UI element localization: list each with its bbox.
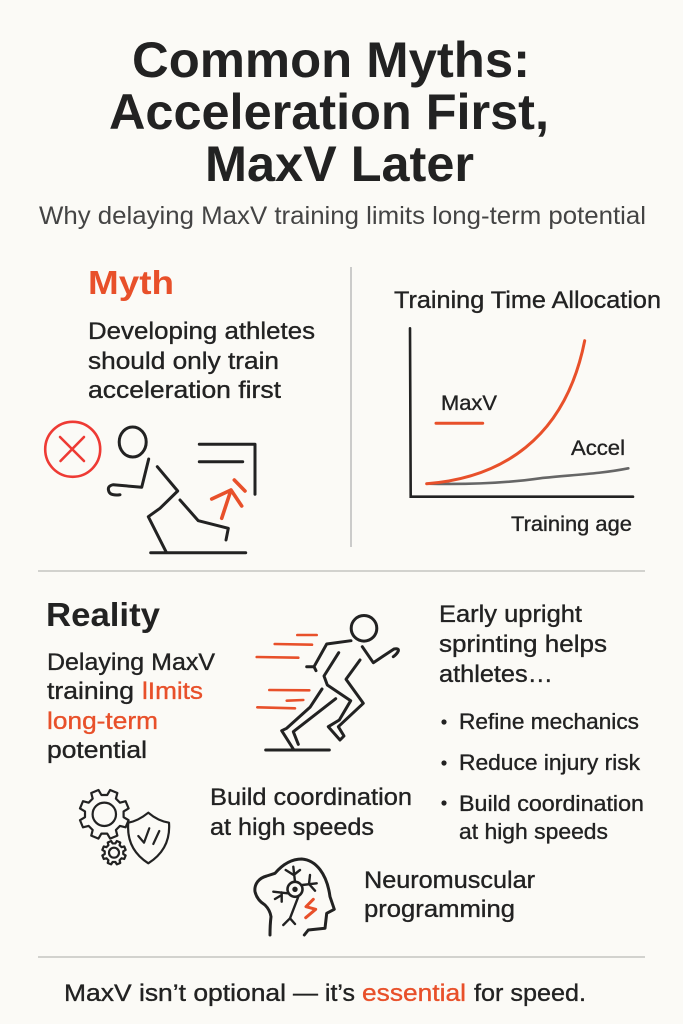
icon: red cross in circle: [45, 422, 100, 477]
myth heading: Myth: [88, 264, 174, 301]
title: MaxV Later: [205, 136, 474, 192]
subtitle: Why delaying MaxV training limits long-term potential: [39, 202, 646, 230]
maxv legend: [436, 392, 497, 423]
footer takeaway: essential: [362, 980, 466, 1007]
reality statement: training: [47, 678, 134, 705]
benefits list: Refine mechanics: [459, 709, 639, 734]
coordination caption: [210, 784, 412, 841]
accel label: Accel: [571, 437, 625, 460]
benefits list: Build coordination: [459, 791, 644, 816]
benefits intro: Early upright: [439, 601, 582, 628]
footer takeaway: — it’s: [293, 980, 355, 1007]
benefits list: at high speeds: [459, 819, 608, 844]
title: Common Myths:: [132, 32, 530, 88]
benefits list: Reduce injury risk: [459, 750, 641, 775]
neuromuscular caption: programming: [364, 896, 515, 923]
neuromuscular caption: Neuromuscular: [364, 867, 535, 894]
reality statement: potential: [47, 737, 147, 764]
icon: gears and shield: [72, 782, 169, 868]
reality statement: [47, 649, 215, 764]
icon: athlete in acceleration stance: [108, 427, 255, 553]
reality statement: lImits: [142, 678, 203, 705]
reality statement: long-term: [47, 708, 158, 735]
chart axes: [410, 328, 633, 497]
coordination caption: Build coordination: [210, 784, 412, 811]
benefits intro: athletes…: [439, 661, 553, 688]
reality heading: Reality: [46, 596, 161, 633]
footer takeaway: MaxV isn’t optional: [64, 980, 286, 1007]
accel line: [427, 468, 628, 484]
maxv legend: MaxV: [441, 392, 497, 415]
benefits intro: sprinting helps: [439, 631, 607, 658]
panel: myth: [45, 264, 315, 553]
reality statement: Delaying MaxV: [47, 649, 215, 676]
icon: orange upward arrow: [212, 480, 245, 518]
myth statement: [88, 318, 315, 404]
benefits list: [441, 709, 644, 844]
x axis label: Training age: [511, 513, 632, 536]
neuromuscular caption: [364, 867, 535, 923]
panel: training time allocation chart: [394, 287, 661, 536]
footer takeaway: [64, 980, 586, 1007]
footer takeaway: for speed.: [474, 980, 586, 1007]
title: [109, 32, 549, 192]
chart title: Training Time Allocation: [394, 287, 661, 314]
title: Acceleration First,: [109, 84, 549, 140]
speed lines: [257, 635, 317, 708]
myth statement: acceleration first: [88, 377, 281, 404]
benefits intro: [439, 601, 607, 688]
maxv curve: [427, 341, 585, 484]
coordination caption: at high speeds: [210, 814, 374, 841]
icon: sprinting runner: [266, 616, 398, 750]
icon: head with neurons: [255, 859, 334, 935]
myth statement: Developing athletes: [88, 318, 315, 345]
myth statement: should only train: [88, 348, 279, 375]
panel: reality: [46, 596, 644, 935]
